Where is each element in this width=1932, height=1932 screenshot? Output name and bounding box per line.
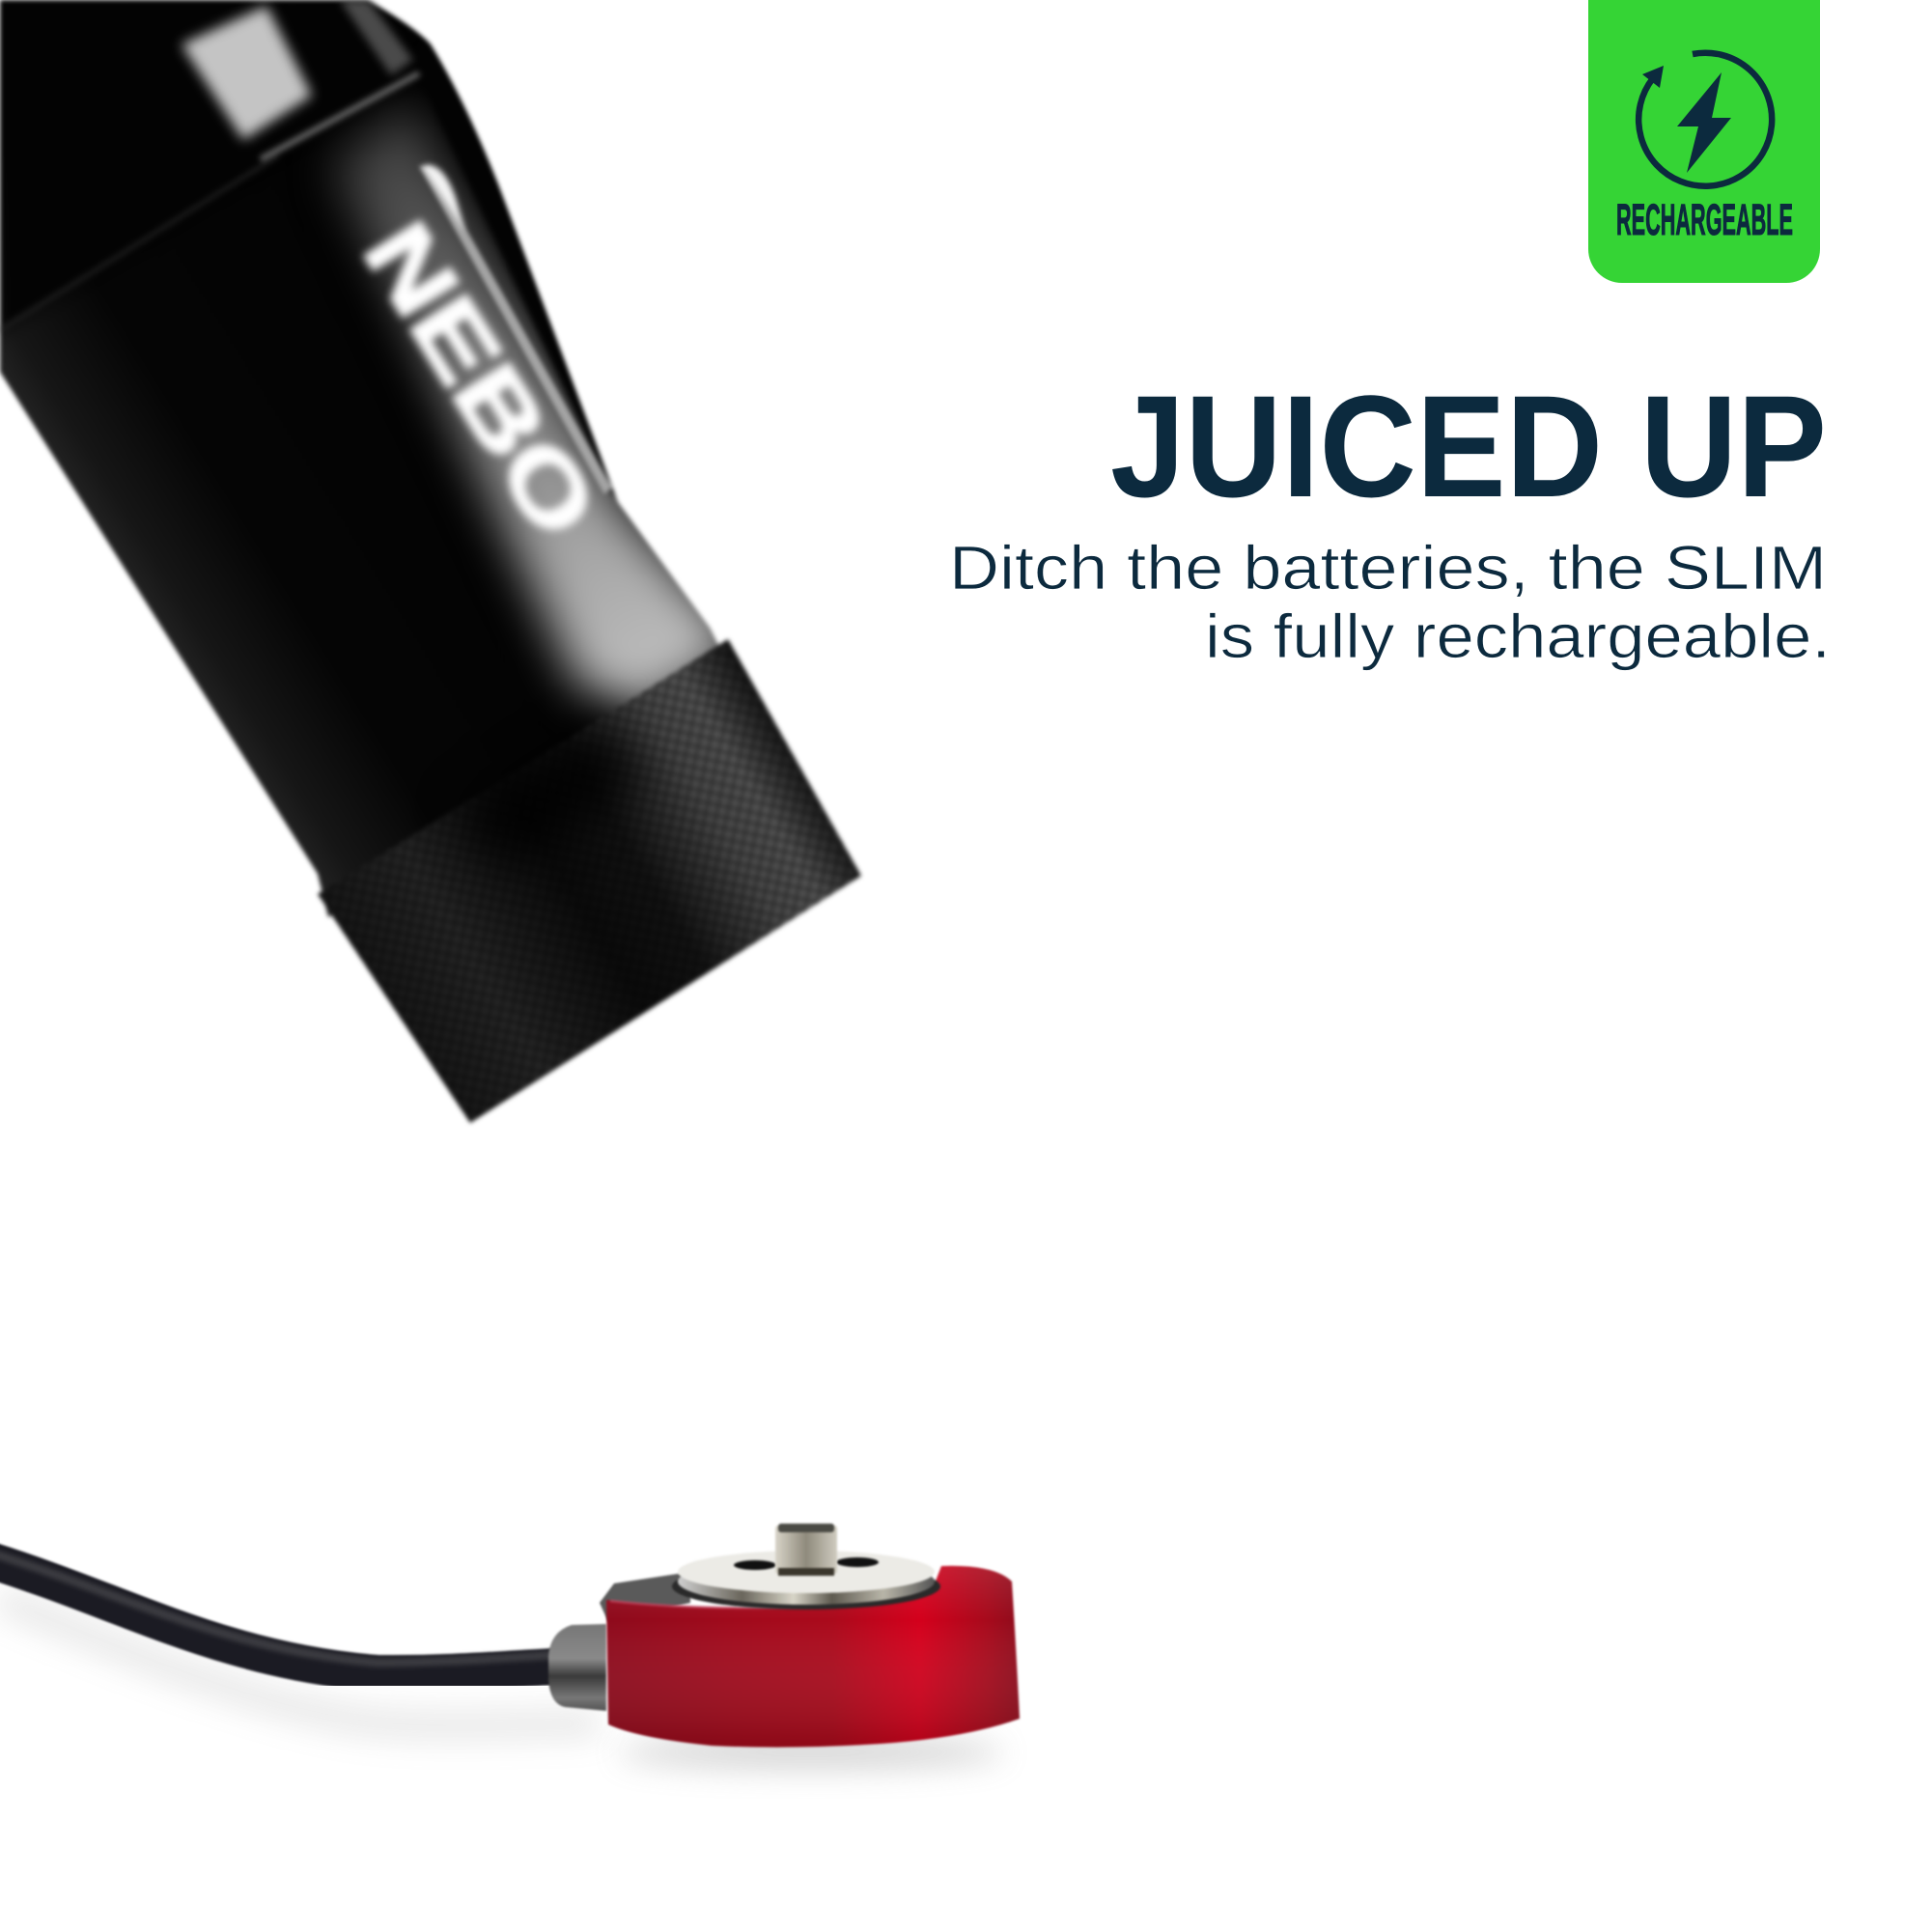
- subheading text: is fully rechargeable.: [1205, 602, 1831, 671]
- cable connector: [548, 1624, 606, 1711]
- metal contact disc: [672, 1551, 940, 1610]
- charging cable: [0, 1553, 555, 1673]
- subheading text: [949, 533, 1831, 671]
- icon: charging bolt with arrow ring: [1638, 53, 1772, 186]
- badge: rechargeable: [1588, 0, 1820, 283]
- contact pin: [775, 1524, 837, 1576]
- red housing: [606, 1566, 1020, 1748]
- badge background: [1588, 0, 1820, 283]
- dock shadow: [618, 1737, 1004, 1768]
- photo: flashlight: [0, 0, 861, 1123]
- subheading text: Ditch the batteries, the SLIM: [949, 533, 1827, 602]
- pocket clip highlight: [0, 0, 612, 494]
- heading: JUICED UP: [1110, 365, 1827, 527]
- grey tab: [600, 1572, 690, 1622]
- flashlight body: [0, 0, 743, 917]
- cable shadow: [0, 1598, 599, 1725]
- photo: charging dock: [0, 1524, 1020, 1768]
- knurled bezel: [318, 639, 861, 1123]
- switch button: [182, 6, 312, 140]
- brand text on barrel: NEBO: [344, 204, 618, 555]
